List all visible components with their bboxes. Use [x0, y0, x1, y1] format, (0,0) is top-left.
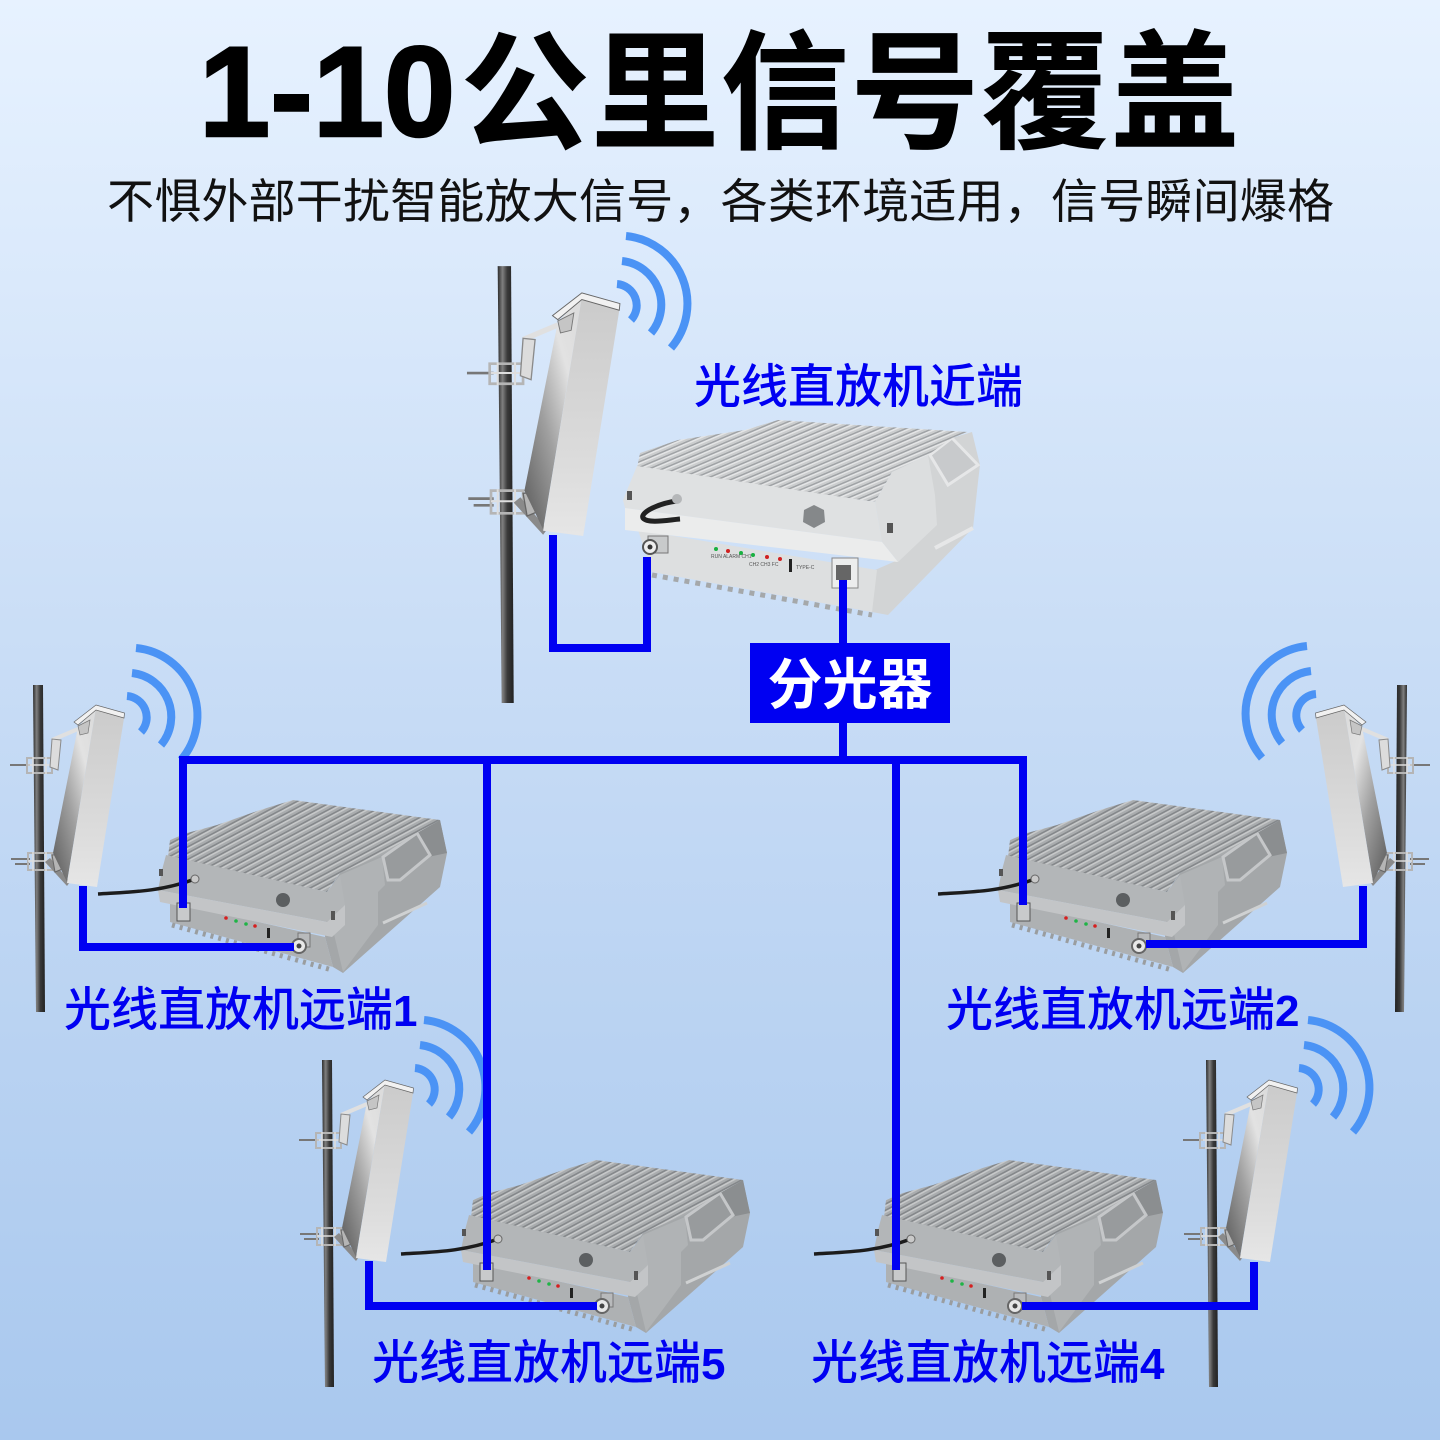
title: 1-10 — [199, 21, 455, 164]
remote 1 repeater — [98, 800, 447, 973]
subtitle: 不惧外部干扰智能放大信号，各类环境适用，信号瞬间爆格 — [107, 163, 1334, 232]
remote 1 signal arcs — [127, 648, 197, 760]
near-end antenna — [467, 266, 620, 703]
label: remote 5: 光线直放机远端5 — [372, 1336, 725, 1389]
remote 2 antenna — [1316, 685, 1430, 1012]
near-end signal arcs — [617, 236, 687, 348]
remote 5 antenna — [299, 1060, 414, 1387]
remote 5 signal arcs — [415, 1020, 485, 1132]
label: remote 4: 光线直放机远端4 — [811, 1336, 1165, 1389]
fibre and feeder wiring — [83, 535, 1363, 1306]
remote 5 repeater — [401, 1160, 750, 1333]
remote 4 signal arcs — [1299, 1020, 1369, 1132]
splitter box: 分光器 — [767, 640, 933, 720]
near-end repeater: CH2 CH3 FC — [749, 562, 779, 568]
near-end repeater: TYPE-C — [796, 565, 815, 571]
label: remote 2: 光线直放机远端2 — [946, 983, 1299, 1036]
remote 4 antenna — [1183, 1060, 1298, 1387]
label: remote 1: 光线直放机远端1 — [64, 983, 417, 1036]
remote 2 signal arcs — [1246, 646, 1316, 758]
remote 2 repeater — [938, 800, 1287, 973]
remote 1 antenna — [10, 685, 124, 1012]
label: near end: 光线直放机近端 — [694, 360, 1023, 413]
near-end repeater — [623, 420, 980, 615]
near-end repeater: RUN ALARM CH1 — [711, 554, 752, 560]
remote 4 repeater — [814, 1160, 1163, 1333]
